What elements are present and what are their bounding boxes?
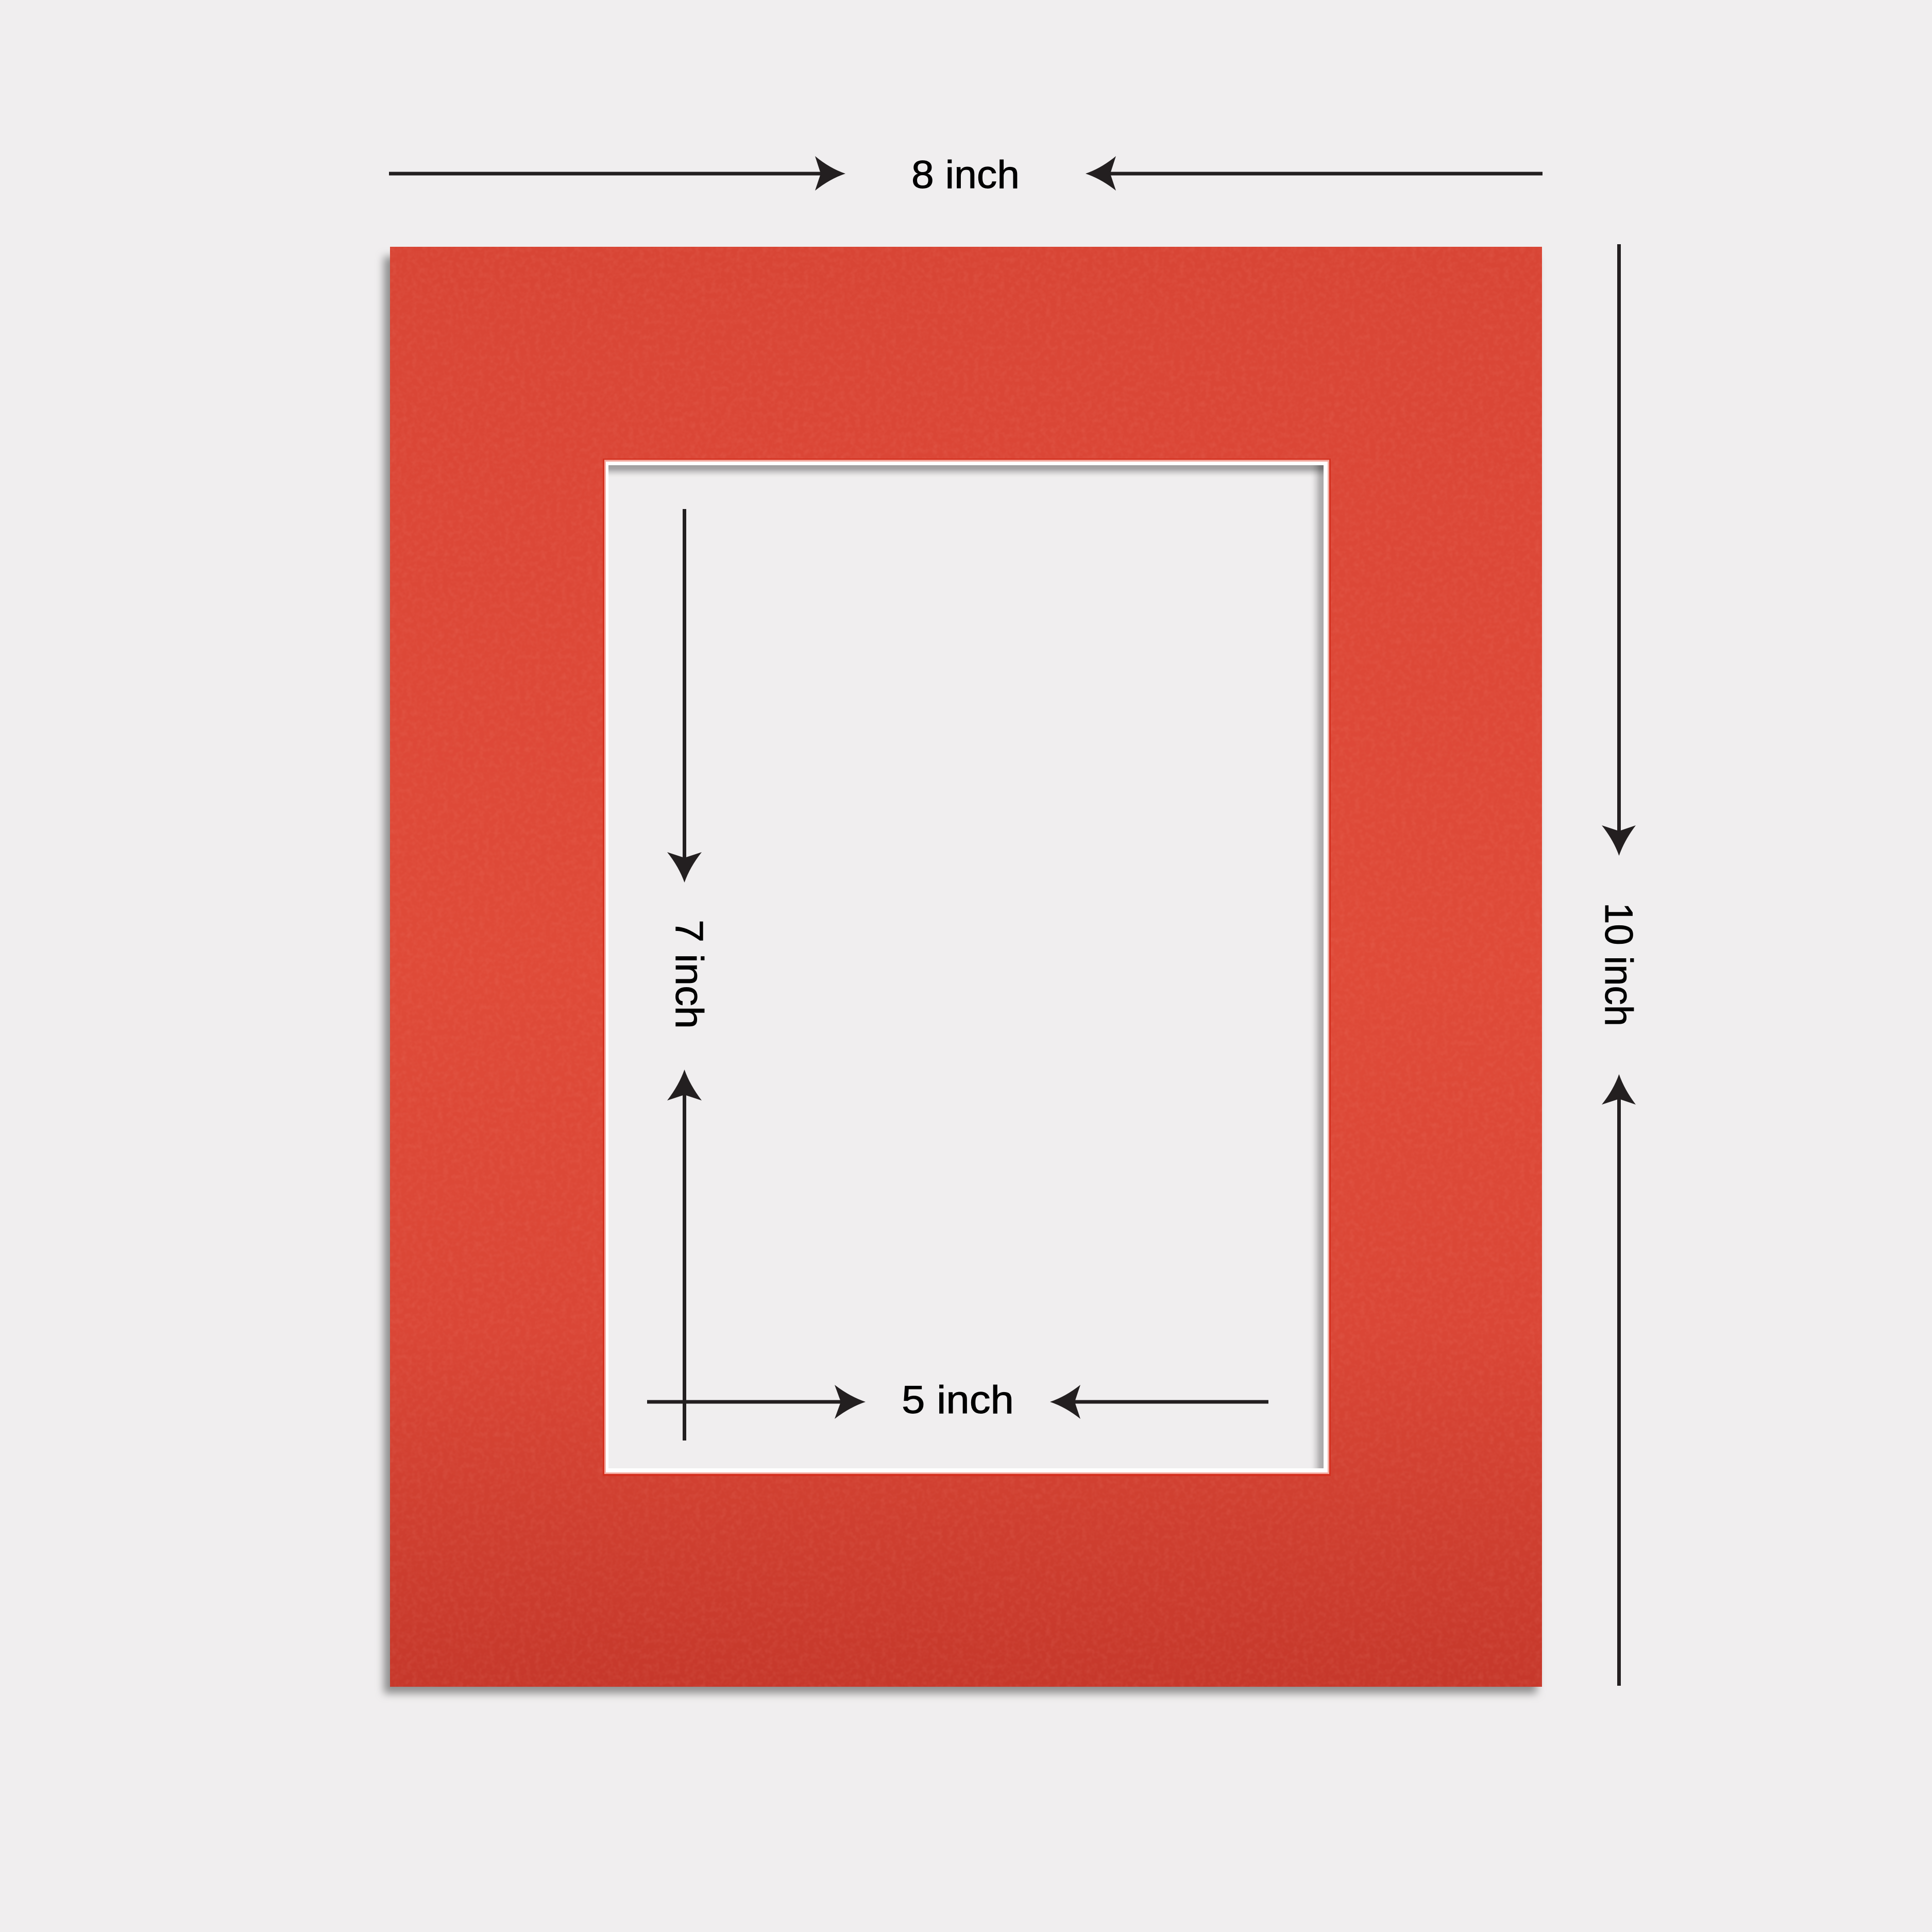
window opening xyxy=(608,465,1324,1468)
label: 8 inch: 8 inch xyxy=(911,153,1020,197)
arrow: 10 inch up xyxy=(1602,1074,1636,1686)
arrow: 5 inch left xyxy=(647,1385,866,1419)
panel: red mat board with cut-out window xyxy=(384,247,1542,1693)
arrow: 5 inch right xyxy=(1050,1385,1268,1419)
label: 7 inch: 7 inch xyxy=(667,920,711,1029)
arrow: 10 inch down xyxy=(1602,244,1636,856)
label: 5 inch: 5 inch xyxy=(902,1378,1014,1422)
arrow: 8 inch left xyxy=(389,156,845,191)
mat drop shadow xyxy=(384,257,1537,1693)
arrow: 7 inch down xyxy=(667,509,702,883)
mat face xyxy=(390,247,1542,1687)
window bevel xyxy=(603,459,1331,1476)
label: 10 inch: 10 inch xyxy=(1597,903,1640,1026)
mat paper grain xyxy=(390,247,1542,1687)
arrow: 7 inch up xyxy=(667,1070,702,1440)
arrow: 8 inch right xyxy=(1086,156,1543,191)
